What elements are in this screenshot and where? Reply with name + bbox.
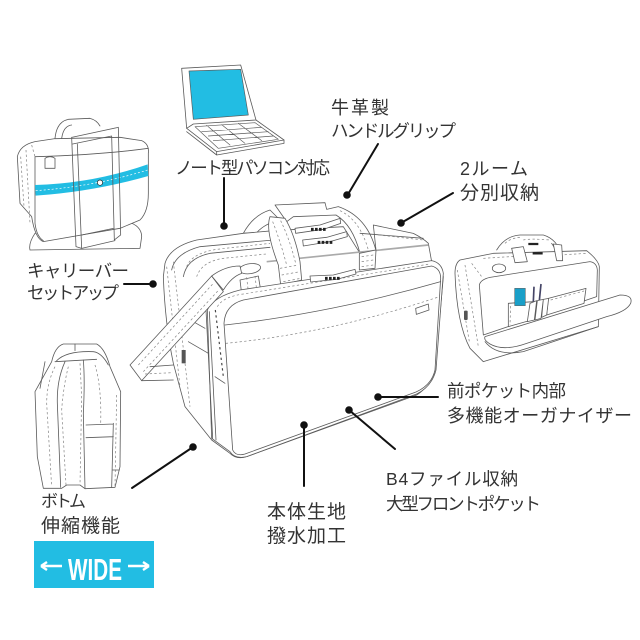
trolley rails: [72, 127, 121, 248]
label: carry bar: キャリーバー: [27, 261, 129, 281]
label: carry bar: セットアップ: [27, 283, 120, 303]
label: expanding bottom: ボトム: [41, 492, 86, 511]
label: handle grip: ハンドルグリップ: [331, 121, 456, 141]
label: handle grip: [331, 98, 456, 141]
label: expanding bottom: [41, 492, 120, 537]
label: two rooms: 分別収納: [460, 182, 539, 204]
label: front pocket organizer: 多機能オーガナイザー: [447, 406, 632, 426]
leader: water repellent: [300, 421, 308, 486]
label: front pocket organizer: [447, 381, 632, 426]
side zipper: [182, 350, 186, 363]
badge: WIDE: [34, 541, 154, 588]
label: B4 pocket: [386, 469, 541, 514]
logo tag: [416, 304, 429, 314]
label: two rooms: 2ルーム: [460, 159, 528, 179]
icon: bag side view: [35, 344, 121, 489]
label: two rooms: [460, 159, 539, 204]
shoulder strap: [130, 276, 223, 381]
icon: laptop: [182, 65, 284, 155]
front panel: [207, 261, 443, 457]
label: water repellent: [267, 501, 346, 547]
leader: handle grip: [343, 144, 378, 199]
ring and strap loop: [240, 276, 261, 294]
leader: carry bar: [124, 280, 157, 288]
zipper pull on top of panel: [310, 269, 356, 282]
bag body: [163, 225, 443, 458]
badge: WIDE: WIDE: [68, 552, 122, 587]
label: expanding bottom: 伸縮機能: [41, 515, 120, 537]
icon: main bag: [130, 203, 443, 458]
label: handle grip: 牛革製: [331, 98, 389, 118]
leader: two rooms: [397, 193, 453, 227]
organizer pockets: [508, 302, 533, 327]
leader: front pocket organizer: [374, 393, 438, 401]
label: notebook: ノート型パソコン対応: [175, 158, 330, 178]
icon: open bag: [455, 235, 631, 362]
open flap: [485, 295, 631, 348]
label: B4 pocket: B4ファイル収納: [386, 469, 518, 489]
label: water repellent: 撥水加工: [267, 525, 346, 547]
label: front pocket organizer: 前ポケット内部: [447, 381, 566, 401]
leader: notebook: [220, 178, 228, 230]
leader: B4 pocket: [345, 406, 395, 449]
label: carry bar: [27, 261, 129, 303]
leader: expanding bottom: [132, 443, 197, 488]
handle front: [269, 217, 376, 285]
zipper pulls: [295, 218, 347, 246]
label: B4 pocket: 大型フロントポケット: [386, 494, 541, 514]
handle back: [243, 203, 376, 253]
label: water repellent: 本体生地: [267, 501, 346, 523]
icon: bag on carry bar: [17, 118, 148, 250]
